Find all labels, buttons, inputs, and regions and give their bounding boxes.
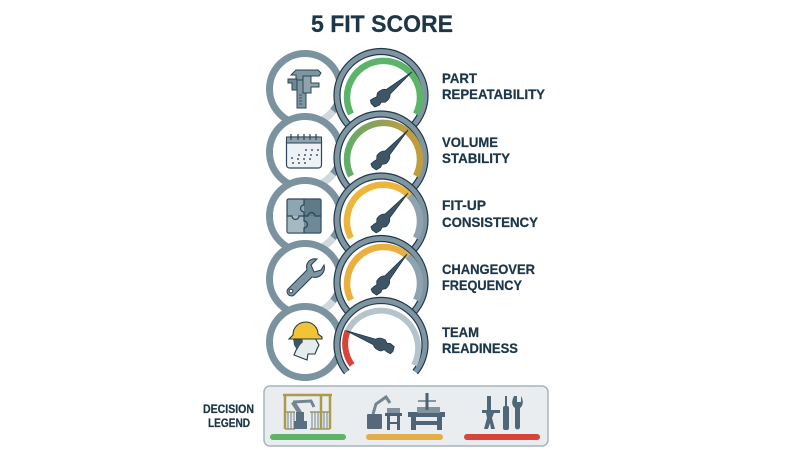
status bar: amber — [366, 434, 443, 440]
label: TEAM — [442, 324, 479, 340]
label: PART — [442, 70, 477, 86]
icon circle: caliper — [270, 54, 340, 124]
row: volume stability: STABILITY — [442, 150, 511, 166]
icon: hand tools — [482, 396, 523, 430]
icon circle: puzzle — [270, 180, 340, 252]
icon: robot cell — [283, 394, 332, 429]
gauge: amber — [334, 173, 428, 267]
icon: robot and welding table — [367, 393, 445, 430]
icon circle: calendar — [270, 116, 340, 188]
legend label — [203, 404, 254, 430]
row: volume stability — [270, 111, 511, 205]
row: team readiness — [270, 297, 518, 378]
status bar: green — [270, 434, 346, 440]
icon circle: wrench — [270, 244, 340, 314]
legend label: LEGEND — [208, 418, 250, 430]
gauge: olive to amber — [334, 111, 428, 205]
gauge: amber — [334, 236, 428, 330]
row: part repeatability — [270, 48, 546, 142]
label: CHANGEOVER — [442, 261, 535, 277]
icon circle: worker — [270, 306, 340, 378]
label: VOLUME — [442, 134, 498, 150]
gauge: red — [334, 297, 428, 374]
row: fit-up consistency — [270, 173, 539, 267]
label: FIT-UP — [442, 197, 486, 213]
legend label: DECISION — [203, 404, 254, 416]
gauge: green — [334, 48, 428, 142]
row: fit-up consistency: CONSISTENCY — [442, 214, 539, 230]
row: changeover frequency: FREQUENCY — [442, 277, 523, 293]
status bar: red — [464, 434, 540, 440]
row: part repeatability: REPEATABILITY — [442, 86, 546, 102]
row: team readiness: READINESS — [442, 340, 518, 356]
row: changeover frequency — [270, 236, 535, 330]
title: 5 FIT SCORE — [311, 11, 453, 38]
panel: decision legend — [264, 386, 548, 446]
